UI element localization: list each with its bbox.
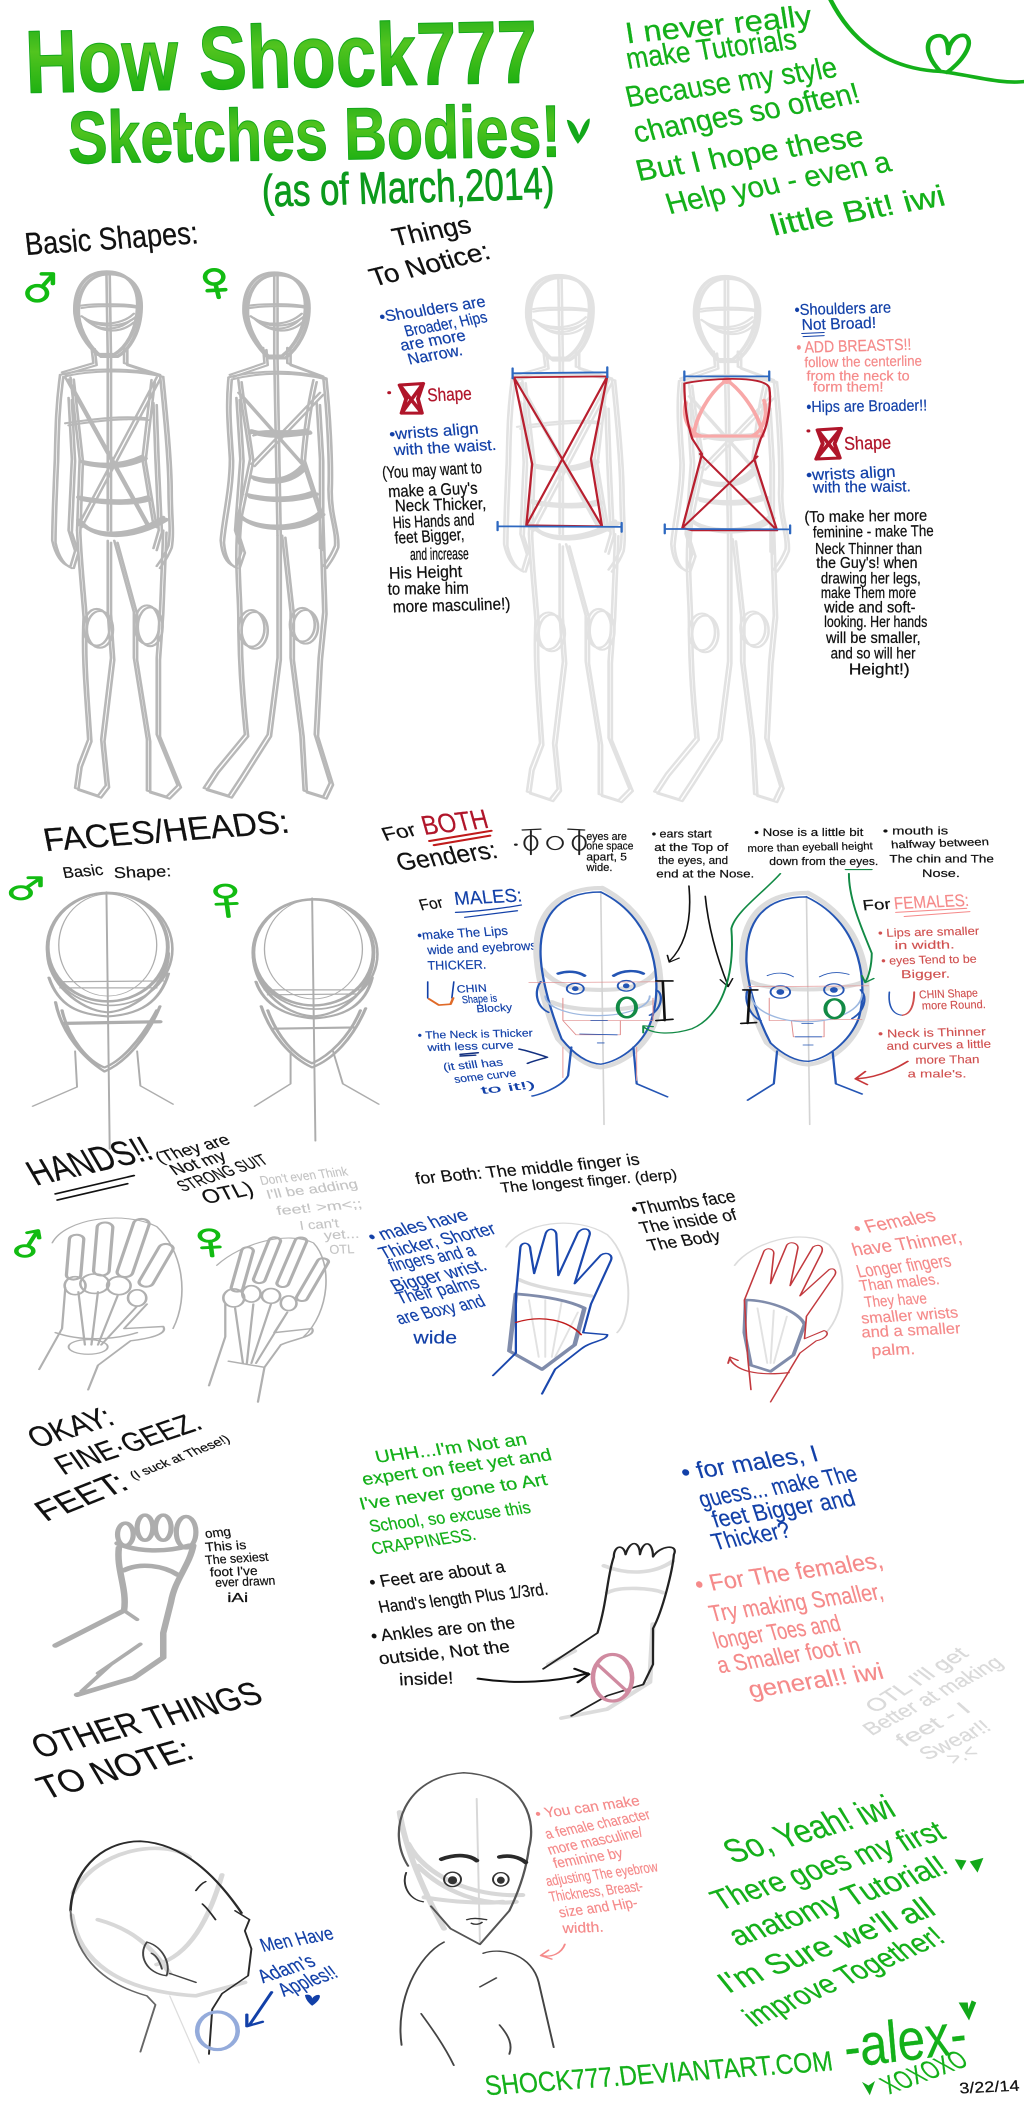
arrow: ears callout xyxy=(667,886,690,962)
notes: head proportions: at the Top of xyxy=(654,841,728,853)
notes: male shape: to make him xyxy=(388,580,469,599)
notes: head proportions: • ears start xyxy=(652,828,712,840)
notes: female shape: with the waist. xyxy=(812,477,911,496)
intro note xyxy=(622,0,949,242)
notes: for females: • eyes Tend to be xyxy=(881,953,977,968)
notes: for females: • Neck is Thinner xyxy=(878,1026,986,1041)
notes: head proportions: end at the Nose. xyxy=(656,868,754,880)
head: female face overlay xyxy=(741,893,868,1125)
notes: female hands: They have xyxy=(863,1290,928,1311)
heading: feet xyxy=(21,1400,233,1527)
notes: for males: some curve xyxy=(452,1067,518,1085)
note: masculine feminine: a female character xyxy=(542,1806,653,1842)
notes: female hands: have Thinner, xyxy=(849,1227,964,1260)
intro note: make Tutorials xyxy=(623,23,799,76)
heading: for both genders: For xyxy=(378,819,420,845)
notes: feet by gender: guess... make The xyxy=(695,1461,861,1513)
foot: outlined xyxy=(543,1544,675,1718)
notes: for males: THICKER. xyxy=(427,957,487,973)
notes: male hands: Their palms xyxy=(392,1273,483,1308)
head: side view xyxy=(71,1841,251,2063)
notes: head proportions: wide. xyxy=(586,861,613,873)
notes: feet by gender: Try making Smaller, xyxy=(706,1579,886,1627)
notes: male shape: •wrists align xyxy=(388,420,479,443)
note: omg foot: The sexiest xyxy=(204,1550,270,1568)
figure: female with shape overlay xyxy=(654,276,790,802)
notes: male shape: His Hands and xyxy=(392,511,475,533)
figure: male with shape overlay xyxy=(498,275,633,802)
notes: female shape: Height!) xyxy=(849,661,910,678)
notes: male hands: wide xyxy=(412,1328,457,1347)
hand: female red overlay xyxy=(728,1237,842,1402)
icon: eye spacing diagram xyxy=(515,829,586,854)
notes: for males: to it!) xyxy=(479,1078,537,1096)
notes: female shape: feminine - make The xyxy=(813,522,934,541)
notes: female shape: from the neck to xyxy=(806,368,910,384)
note: omg foot: ever drawn xyxy=(215,1574,276,1590)
notes: for females xyxy=(855,890,991,1085)
notes: for females: more Than xyxy=(915,1053,980,1067)
note: feet disclaimer: inside! xyxy=(398,1668,454,1689)
note: masculine feminine: Thickness, Breast- xyxy=(547,1878,645,1905)
heading: for both genders: BOTH xyxy=(418,803,492,841)
notes: for females: in width. xyxy=(894,939,955,952)
notes: male shape: are more xyxy=(398,326,468,354)
notes: male shape: feet Bigger, xyxy=(394,526,465,548)
notes: female shape: form them! xyxy=(813,379,884,395)
heading: things to notice: Things xyxy=(389,210,474,252)
notes: male shape: •Shoulders are xyxy=(377,293,487,326)
notes: male hands: are Boxy and xyxy=(391,1291,489,1328)
heading: faces and heads: Basic xyxy=(61,861,105,882)
note: feet disclaimer xyxy=(357,1429,554,1689)
arrow: ears callout to female xyxy=(705,896,733,987)
heading: hands: STRONG SUIT xyxy=(173,1151,272,1195)
heading: feet: FINE·GEEZ. xyxy=(49,1407,208,1481)
heading: hands: yet... xyxy=(323,1226,360,1243)
note: both hands: The inside of xyxy=(637,1205,740,1237)
notes: for males: (it still has xyxy=(442,1056,504,1073)
notes: female hands xyxy=(849,1205,964,1359)
title: (as of March,2014) xyxy=(261,158,555,216)
notes: female hands: smaller wrists xyxy=(860,1304,959,1327)
heading: faces and heads xyxy=(40,804,292,882)
heading: hands: Don't even Think xyxy=(258,1164,350,1188)
notes: male shape: Narrow. xyxy=(405,341,465,368)
note: omg foot: omg xyxy=(204,1525,232,1541)
icon: corner heart curve xyxy=(831,0,1024,82)
note: feet disclaimer: • Ankles are on the xyxy=(369,1613,517,1646)
note: adams apple: Men Have xyxy=(257,1922,337,1956)
notes: female hands: • Females xyxy=(850,1205,939,1239)
notes: for males xyxy=(416,885,547,1096)
heading: for both genders xyxy=(378,803,501,876)
note: both hands: •Thumbs face xyxy=(628,1186,738,1219)
title xyxy=(23,1,590,216)
note: feet disclaimer: • Feet are about a xyxy=(367,1557,507,1592)
closing note: I'm Sure we'll all xyxy=(710,1891,942,1999)
notes: male shape: (You may want to xyxy=(381,459,483,483)
note: omg foot: foot I've xyxy=(209,1564,258,1580)
note: masculine feminine: size and Hip- xyxy=(557,1894,639,1921)
head: female construction xyxy=(253,898,379,1141)
heading: hands: OTL xyxy=(329,1242,355,1257)
notes: for females: CHIN Shape xyxy=(919,987,978,1001)
notes: female shape: •Hips are Broader!! xyxy=(806,397,927,416)
heading: hands xyxy=(19,1129,364,1257)
notes: female shape: the Guy's! when xyxy=(816,554,917,572)
note: masculine feminine: • You can make xyxy=(533,1792,642,1822)
icon: female symbol heads xyxy=(215,885,236,916)
notes: male shape: Broader, Hips xyxy=(402,308,489,340)
notes: head proportions: one space xyxy=(586,840,634,852)
note: feet disclaimer: School, so excuse this xyxy=(367,1498,533,1536)
notes: female shape: make Them more xyxy=(821,584,916,602)
notes: feet by gender: Better at making xyxy=(857,1652,1008,1739)
notes: head proportions: • mouth is xyxy=(883,825,948,837)
notes: for males: MALES: xyxy=(453,885,523,910)
heading: hands: I can't xyxy=(298,1216,340,1233)
heading: hands: Not my xyxy=(166,1147,231,1179)
notes: male hands: Bigger wrist. xyxy=(386,1255,490,1295)
notes: head proportions: eyes are xyxy=(586,830,627,842)
notes: for males: • The Neck is Thicker xyxy=(417,1027,533,1041)
notes: female hands: palm. xyxy=(871,1341,916,1359)
notes: for males: Shape is xyxy=(461,992,498,1006)
hand: male construction xyxy=(39,1218,182,1390)
closing note: So, Yeah! iwi xyxy=(715,1788,902,1870)
head: male face overlay xyxy=(529,888,673,1125)
icon: female symbol hands xyxy=(200,1230,219,1256)
closing note: anatomy Tutorial! xyxy=(721,1850,954,1952)
heading: faces and heads: FACES/HEADS: xyxy=(40,804,292,859)
notes: feet by gender: feet - I xyxy=(890,1698,976,1750)
notes: male shape: make a Guy's xyxy=(388,480,478,502)
figure: female base xyxy=(204,273,338,799)
icon: male symbol heads xyxy=(11,878,40,899)
title: Sketches Bodies! xyxy=(67,90,562,180)
closing note: improve Together! xyxy=(736,1922,952,2033)
note: feet disclaimer: Hand's length Plus 1/3rd. xyxy=(377,1579,550,1617)
note: masculine feminine: more masculine/ xyxy=(545,1824,645,1858)
notes: female shape: Shape xyxy=(844,433,892,454)
notes: for females: Bigger. xyxy=(901,968,950,981)
notes: male shape: His Height xyxy=(389,563,463,583)
notes: for males: wide and eyebrows xyxy=(426,938,537,957)
notes: head proportions: The chin and The xyxy=(889,853,994,865)
closing note xyxy=(704,1788,983,2033)
notes: head proportions: more than eyeball height xyxy=(747,840,873,854)
notes: male shape: Shape xyxy=(427,384,472,406)
notes: female shape: and so will her xyxy=(831,644,916,662)
notes: head proportions: • Nose is a little bit xyxy=(754,826,863,838)
heading: hands: I'll be adding xyxy=(264,1177,360,1202)
notes: feet by gender: Thicker? xyxy=(708,1517,794,1556)
notes: feet by gender: feet Bigger and xyxy=(708,1486,859,1533)
notes: female shape: •wrists align xyxy=(806,463,896,484)
intro note: But I hope these xyxy=(632,120,867,188)
notes: for males: Blocky xyxy=(476,1001,514,1015)
icon: male symbol hands xyxy=(16,1231,39,1256)
heading: hands: (They are xyxy=(151,1131,234,1167)
notes: for males: •make The Lips xyxy=(416,924,509,943)
intro note: changes so often! xyxy=(629,77,864,150)
heading: hands: OTL) xyxy=(197,1177,258,1208)
note: masculine feminine: adjusting The eyebrow xyxy=(544,1859,660,1889)
heading: other things to note: OTHER THINGS xyxy=(25,1675,269,1765)
notes: head proportions: Nose. xyxy=(922,867,960,879)
notes: male shape: and increase xyxy=(410,545,469,564)
intro note: little Bit! iwi xyxy=(766,179,949,242)
heading: for both genders: Genders: xyxy=(392,836,501,876)
notes: male shape: with the waist. xyxy=(392,436,497,459)
notes: for males: with less curve xyxy=(426,1039,514,1053)
notes: for females: • Lips are smaller xyxy=(878,925,980,940)
heading: things to notice: To Notice: xyxy=(365,237,494,292)
notes: female shape: •Shoulders are xyxy=(794,299,891,319)
notes: female shape: looking. Her hands xyxy=(824,613,927,630)
note: omg foot: This is xyxy=(204,1539,247,1555)
notes: female shape: will be smaller, xyxy=(825,629,921,647)
notes: female hands: and a smaller xyxy=(860,1320,961,1341)
notes: for males: CHIN xyxy=(456,982,487,995)
notes: feet by gender: >.< xyxy=(942,1741,982,1769)
heading: feet: (I suck at These!) xyxy=(126,1432,233,1482)
heading: faces and heads: Shape: xyxy=(113,863,172,882)
note: both hands: The longest finger. (derp) xyxy=(499,1167,679,1196)
note: adams apple: Apples!! xyxy=(273,1962,342,2000)
notes: male hands: Thicker, Shorter xyxy=(375,1218,500,1263)
heading: hands: feet! >m<;; xyxy=(275,1197,364,1218)
notes: head proportions: the eyes, and xyxy=(658,854,728,866)
heading: hands: HANDS!! xyxy=(19,1129,160,1193)
note: feet disclaimer: UHH...I'm Not an xyxy=(373,1429,529,1467)
intro note: Help you - even a xyxy=(661,145,895,221)
notes: female shape: wide and soft- xyxy=(823,599,916,616)
notes: feet by gender: a Smaller foot in xyxy=(714,1633,864,1679)
notes: feet by gender: general!! iwi xyxy=(745,1659,887,1703)
note: feet disclaimer: expert on feet yet and xyxy=(359,1445,554,1489)
note: masculine feminine: width. xyxy=(561,1919,604,1936)
arrow: mouth callout xyxy=(846,870,874,983)
heading: feet: OKAY: xyxy=(21,1400,120,1454)
notes: female shape: follow the centerline xyxy=(804,353,922,371)
note: masculine feminine xyxy=(533,1792,660,1959)
note: feet disclaimer: I've never gone to Art xyxy=(357,1470,549,1514)
notes: male shape: Neck Thicker, xyxy=(394,495,487,516)
heading: things to notice xyxy=(365,210,494,292)
note: both hands: for Both: The middle finger is xyxy=(413,1150,641,1188)
foot: grey sketch xyxy=(56,1515,196,1695)
notes: feet by gender xyxy=(678,1441,1008,1769)
notes: for males: For xyxy=(417,894,446,914)
notes: for females: a male's. xyxy=(908,1068,966,1081)
hand: female construction xyxy=(209,1237,330,1402)
notes: male hands xyxy=(363,1205,500,1347)
notes: head proportions: apart, 5 xyxy=(586,851,627,863)
notes: female shape xyxy=(794,299,934,678)
notes: female shape: • ADD BREASTS!! xyxy=(796,335,912,356)
notes: for females: For xyxy=(861,896,892,914)
notes: feet by gender: Swear!! xyxy=(914,1716,996,1764)
note: feet disclaimer: outside, Not the xyxy=(377,1637,511,1668)
notes: female shape: (To make her more xyxy=(804,507,927,526)
notes: feet by gender: longer Toes and xyxy=(710,1611,844,1654)
head: female portrait xyxy=(399,1773,554,2065)
notes: male hands: • males have xyxy=(363,1205,472,1246)
notes: head proportions xyxy=(586,825,994,880)
note: feet disclaimer: CRAPPINESS. xyxy=(369,1525,478,1558)
icon: female symbol xyxy=(205,270,225,297)
notes: female shape: Neck Thinner than xyxy=(815,540,922,557)
arrow: nose callout xyxy=(643,874,780,1033)
hand: male blue overlay xyxy=(493,1223,628,1394)
note: both hands xyxy=(413,1150,740,1255)
notes: female shape: drawing her legs, xyxy=(821,570,921,587)
notes: feet by gender: OTL I'll get xyxy=(859,1643,974,1717)
icon: male symbol xyxy=(27,274,53,301)
notes: feet by gender: • for males, I xyxy=(678,1441,821,1486)
heading: other things to note xyxy=(25,1675,269,1806)
notes: feet by gender: • For The females, xyxy=(692,1548,886,1598)
notes: male shape: more masculine!) xyxy=(392,595,511,617)
notes: head proportions: down from the eyes. xyxy=(769,855,878,867)
head: male construction xyxy=(33,892,173,1149)
notes: female shape: Not Broad! xyxy=(801,314,876,333)
notes: male shape xyxy=(377,293,511,617)
note: both hands: The Body xyxy=(644,1226,723,1255)
notes: male hands: fingers and a xyxy=(384,1240,479,1275)
note: masculine feminine: feminine by xyxy=(551,1845,625,1871)
arrow: ankle callout xyxy=(478,1669,589,1682)
heading: other things to note: TO NOTE: xyxy=(30,1731,200,1806)
note: adams apple: Adam's xyxy=(252,1950,320,1987)
note: omg foot xyxy=(204,1525,276,1605)
heading: basic shapes: Basic Shapes: xyxy=(23,215,200,262)
heading: feet: FEET: xyxy=(27,1466,135,1527)
notes: head proportions: halfway between xyxy=(891,835,989,851)
note: adams apple xyxy=(247,1922,342,2026)
figure: male base xyxy=(52,272,181,799)
note: omg foot: iAi xyxy=(227,1592,248,1605)
notes: female hands: Than males. xyxy=(858,1271,941,1295)
intro note: Because my style xyxy=(622,51,840,114)
